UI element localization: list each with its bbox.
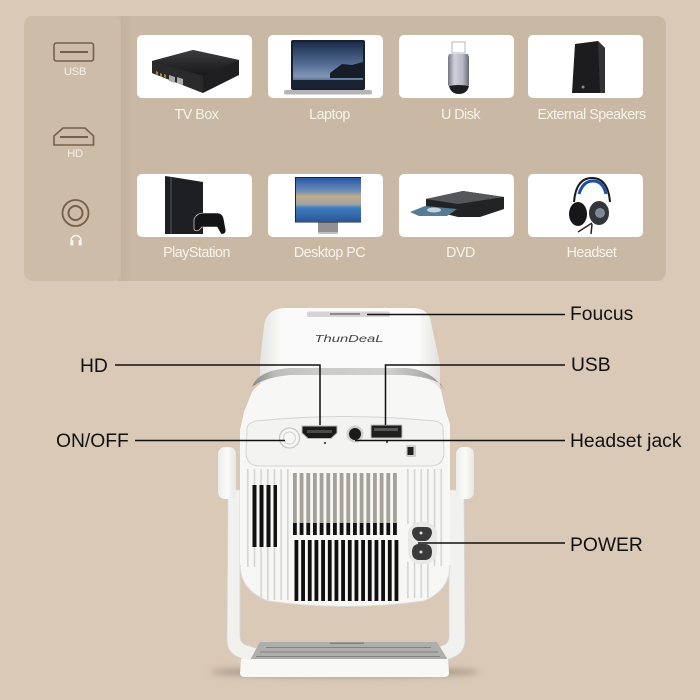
callout: ON/OFF: ON/OFF — [56, 431, 129, 452]
icon: USB port — [54, 43, 94, 61]
label: HD: HD — [67, 148, 83, 160]
callout: USB: USB — [571, 355, 611, 376]
power inlet — [408, 522, 437, 564]
callout: Foucus: Foucus — [570, 304, 633, 325]
icon: laptop — [284, 40, 372, 94]
label: U Disk: U Disk — [441, 107, 481, 123]
icon: headphones — [70, 236, 82, 246]
callout: Headset jack: Headset jack — [570, 431, 682, 452]
base shadow — [210, 668, 480, 676]
callout: HD: HD — [80, 356, 108, 377]
icon: headset — [569, 178, 610, 234]
icon: monitor — [295, 177, 361, 234]
icon: audio jack — [62, 200, 88, 226]
silver band — [252, 368, 445, 392]
card: TV Box — [137, 35, 252, 123]
power button — [280, 428, 300, 448]
USB port — [371, 425, 402, 438]
label: DVD: DVD — [446, 245, 475, 261]
stand arms — [227, 490, 262, 668]
callout: POWER: POWER — [570, 535, 643, 556]
label: External Speakers: External Speakers — [537, 107, 646, 123]
card: External Speakers — [528, 35, 646, 123]
main vent upper — [293, 473, 398, 523]
label: Desktop PC: Desktop PC — [294, 245, 365, 261]
card: DVD — [399, 174, 514, 261]
card: Laptop — [268, 35, 383, 123]
plate print — [256, 642, 440, 657]
small switch — [406, 445, 416, 457]
focus wheel — [307, 312, 390, 317]
panel: port legend — [24, 16, 133, 281]
card: U Disk — [399, 35, 514, 123]
main vent lower — [294, 540, 398, 601]
icon: DVD player — [410, 191, 504, 217]
icon: console and controller — [165, 176, 226, 234]
port panel — [246, 416, 444, 466]
left vent — [252, 485, 277, 547]
callout: HD — [80, 356, 320, 425]
main body — [240, 375, 450, 606]
side ribs — [247, 469, 444, 600]
top housing — [260, 308, 440, 400]
projector — [210, 308, 480, 677]
label: TV Box: TV Box — [175, 107, 219, 123]
HDMI port — [302, 426, 337, 438]
label: USB: USB — [64, 66, 86, 78]
audio jack — [346, 426, 364, 442]
card: Desktop PC — [268, 174, 383, 261]
label: Headset: Headset — [567, 245, 617, 261]
panel: compatible devices — [110, 16, 666, 281]
card: PlayStation — [137, 174, 252, 261]
main vent dark strip — [293, 523, 398, 535]
label: Laptop: Laptop — [309, 107, 350, 123]
icon: HD port — [54, 128, 94, 145]
stand base — [240, 659, 449, 677]
label: PlayStation: PlayStation — [163, 245, 230, 261]
callout: USB — [386, 355, 611, 425]
icon: TV box — [152, 50, 239, 93]
hinge knobs — [218, 447, 236, 499]
brand logo: ThunDeaL — [314, 333, 384, 345]
icon: speaker — [572, 41, 605, 93]
stand base plate — [250, 642, 448, 660]
card: Headset — [528, 174, 643, 261]
icon: USB stick — [448, 42, 469, 94]
